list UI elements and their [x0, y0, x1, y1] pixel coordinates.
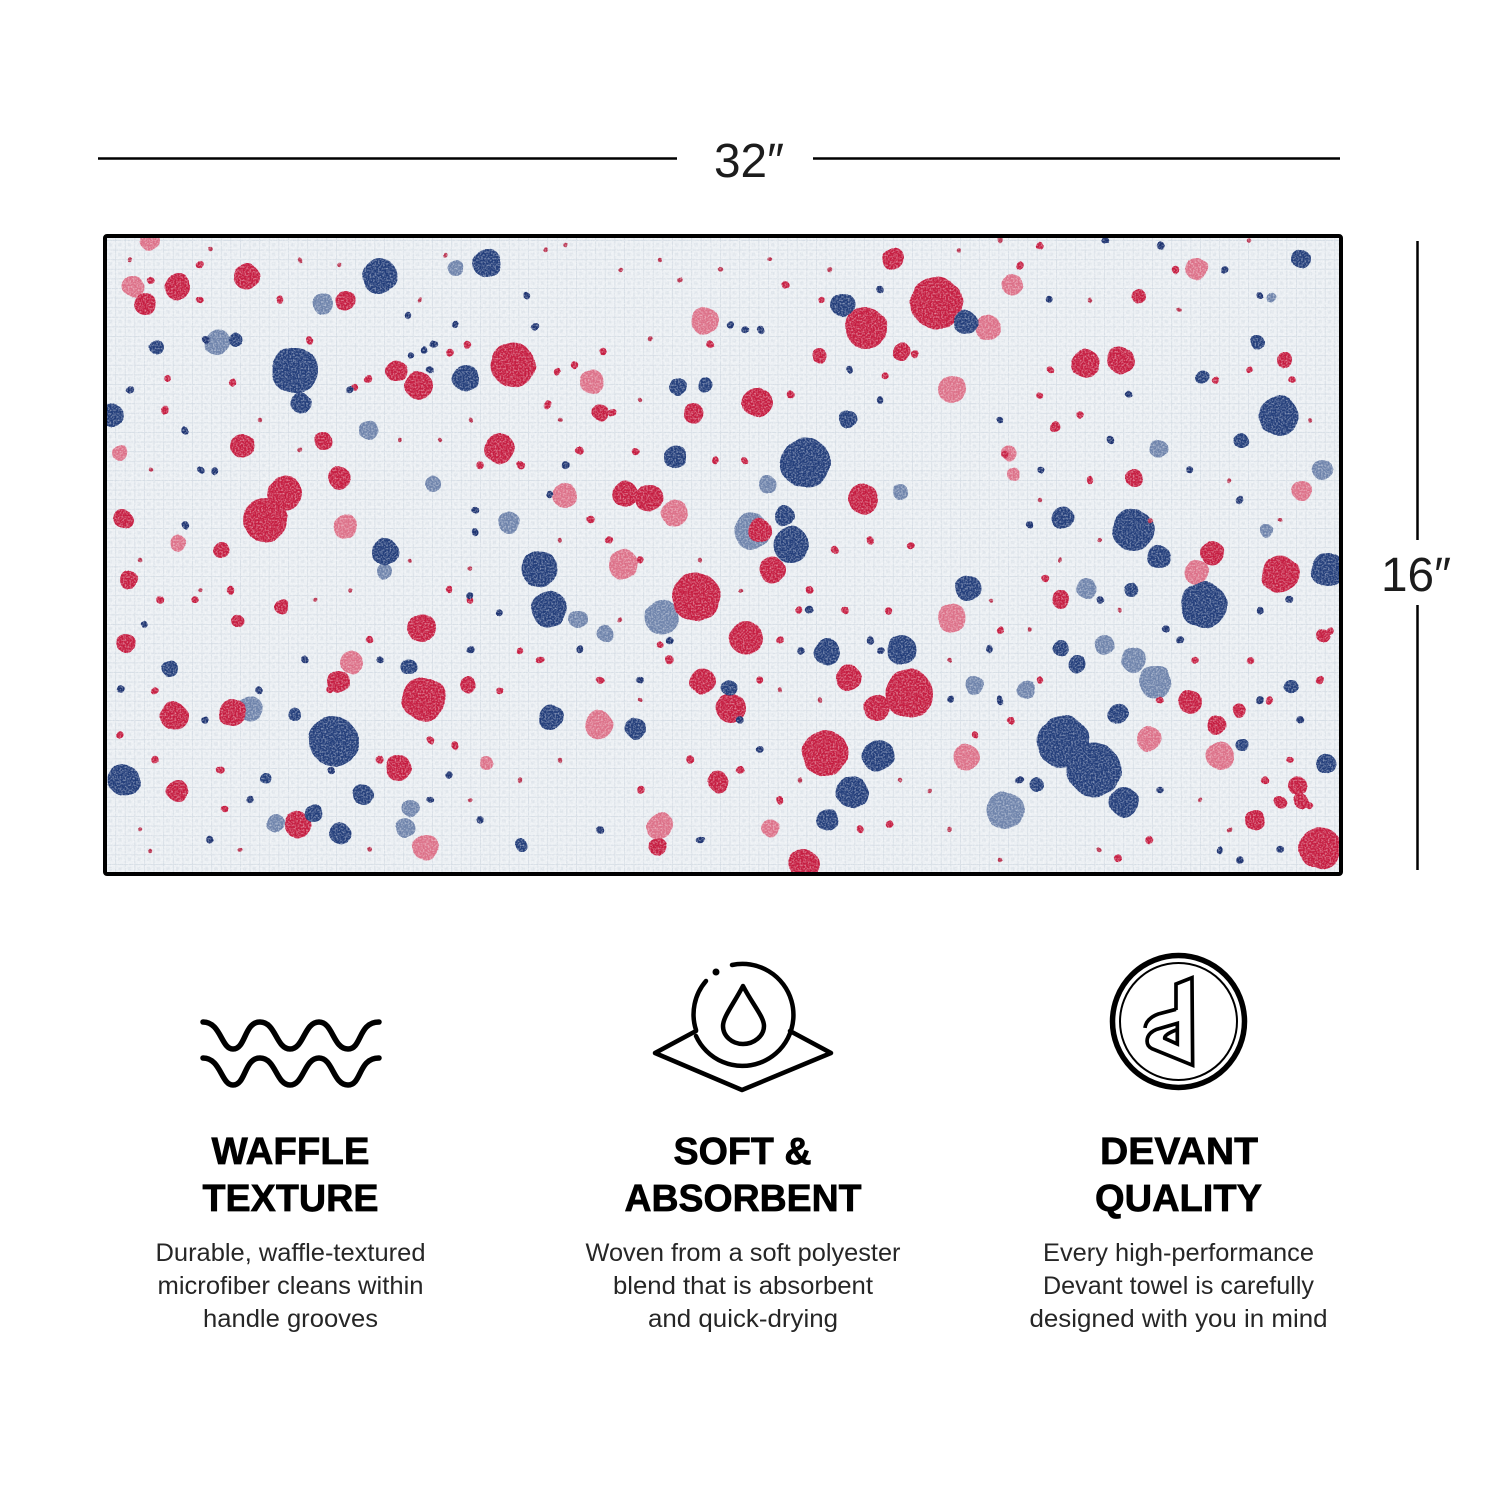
icon: waves — [203, 1022, 379, 1085]
description: waffle texture: microfiber cleans within — [158, 1272, 424, 1300]
description: soft and absorbent: Woven from a soft polyester — [586, 1239, 900, 1267]
heading: waffle texture: TEXTURE — [202, 1178, 378, 1220]
column: devant quality — [1030, 956, 1328, 1333]
towel with splatter pattern — [102, 231, 1345, 881]
description: devant quality: designed with you in mind — [1030, 1305, 1328, 1333]
pale splatter blobs — [112, 231, 1332, 860]
tiny navy droplets — [120, 240, 1300, 860]
description: devant quality: Every high-performance — [1043, 1239, 1314, 1267]
icon: devant logo — [1112, 956, 1244, 1088]
small red droplets — [120, 245, 1330, 858]
height dimension: 16 inches: 16″ — [1381, 549, 1451, 602]
description: waffle texture: handle grooves — [203, 1305, 378, 1333]
description: soft and absorbent: and quick-drying — [648, 1305, 838, 1333]
column: waffle texture — [156, 1022, 426, 1333]
width dimension: 32 inches: 32″ — [714, 135, 784, 188]
red splatter blobs — [113, 248, 1341, 881]
description: devant quality: Devant towel is carefully — [1043, 1272, 1314, 1300]
heading: soft and absorbent: SOFT & — [674, 1131, 812, 1173]
icon: water drop on cloth — [655, 964, 831, 1090]
heading: soft and absorbent: ABSORBENT — [624, 1178, 862, 1220]
pin-prick droplets — [130, 240, 1310, 860]
column: soft and absorbent — [586, 964, 900, 1333]
heading: waffle texture: WAFFLE — [212, 1131, 370, 1173]
heading: devant quality: QUALITY — [1095, 1178, 1262, 1220]
description: soft and absorbent: blend that is absorbent — [613, 1272, 873, 1300]
heading: devant quality: DEVANT — [1100, 1131, 1258, 1173]
navy splatter blobs — [102, 250, 1345, 852]
description: waffle texture: Durable, waffle-textured — [156, 1239, 426, 1267]
